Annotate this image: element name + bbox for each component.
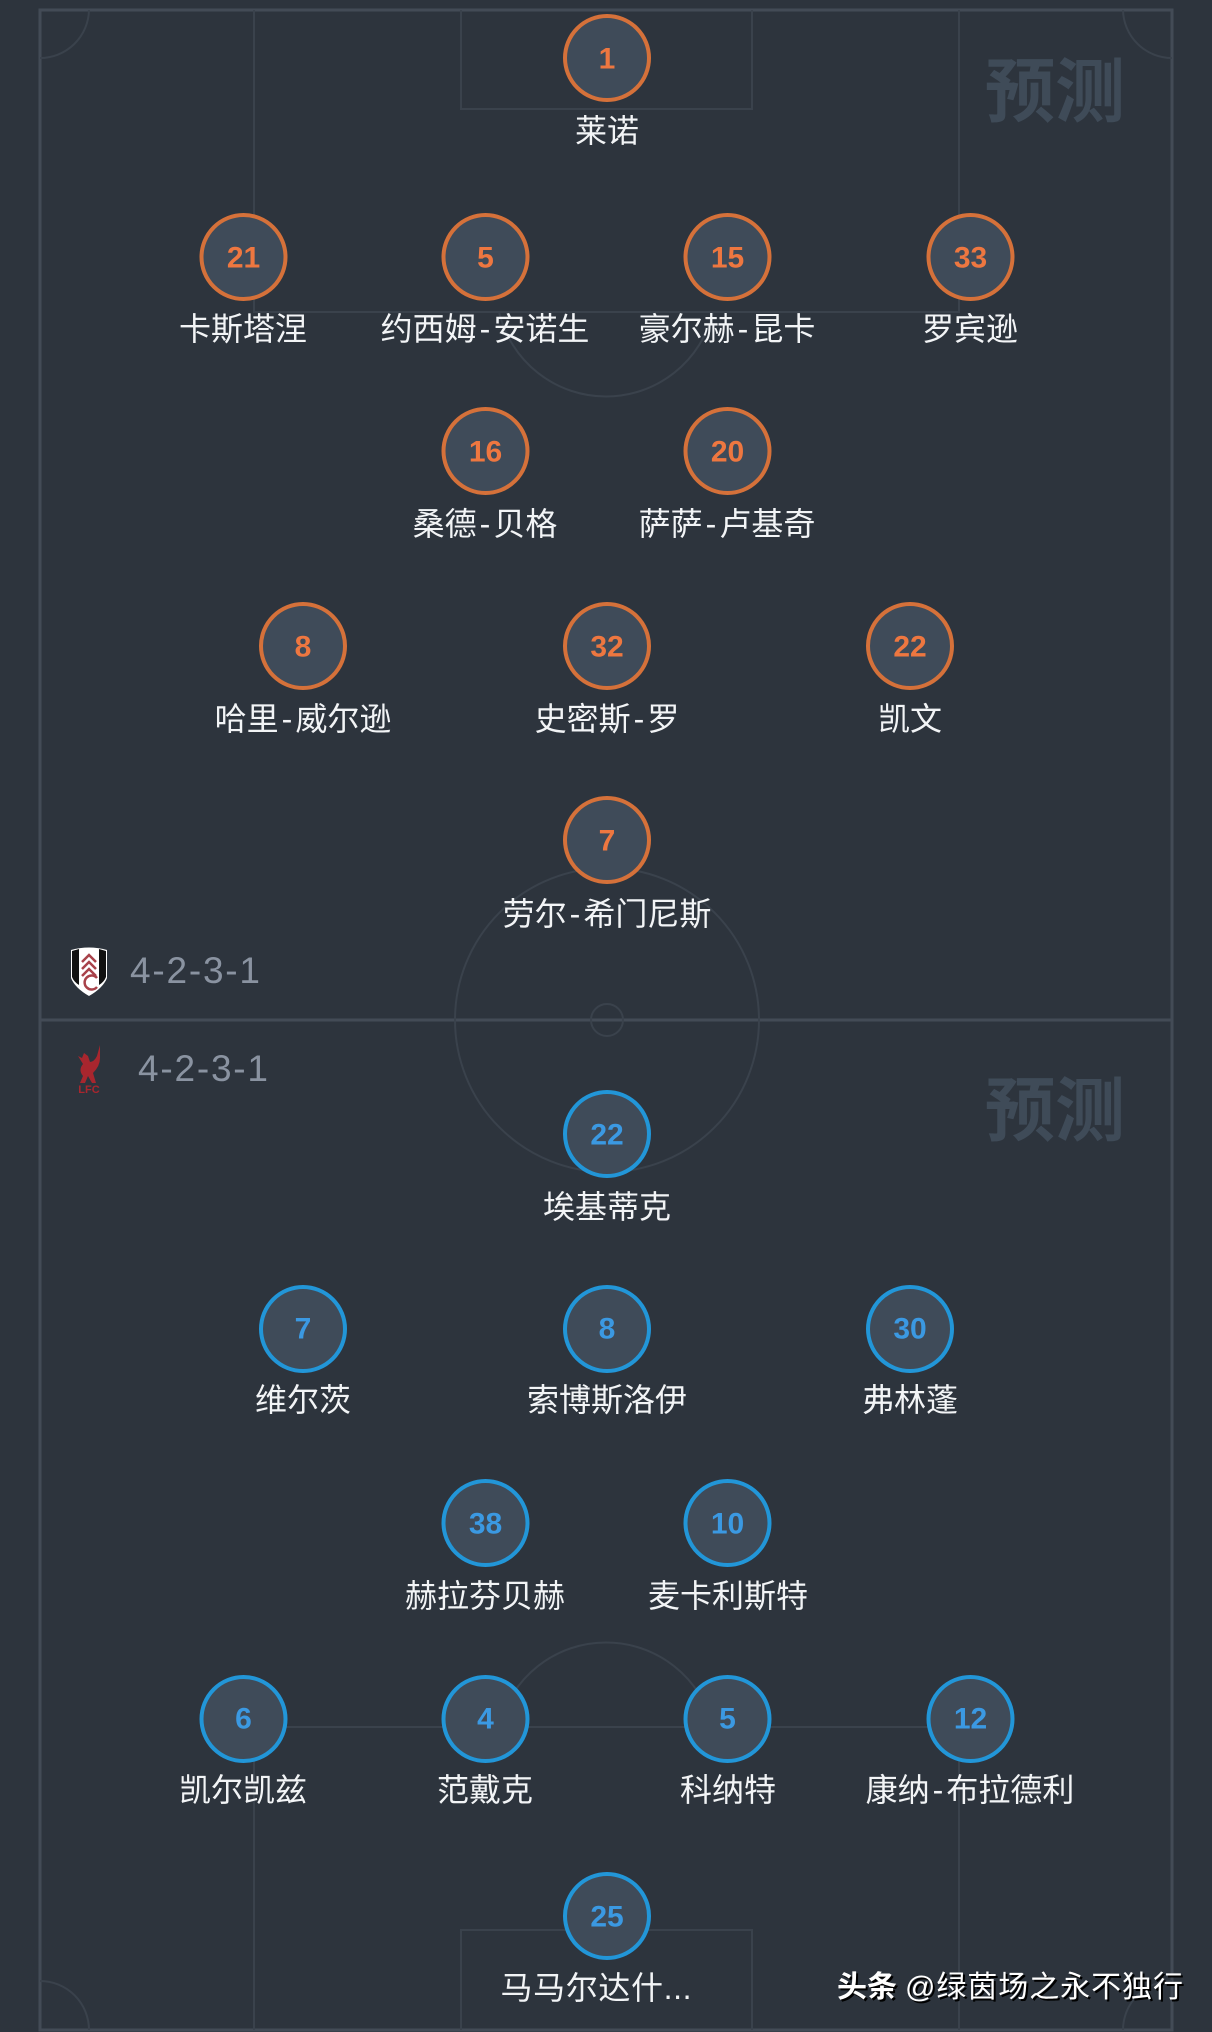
player: 萨萨-卢基奇 [639, 409, 815, 542]
player: 埃基蒂克: 22 [590, 1118, 624, 1152]
player: 维尔茨: 维尔茨 [255, 1382, 351, 1418]
player: 哈里-威尔逊: 8 [295, 630, 311, 664]
player: 马马尔达什: 25 [590, 1900, 624, 1934]
player: 桑德-贝格: 16 [469, 436, 502, 468]
player: 劳尔-希门尼斯: 劳尔-希门尼斯 [503, 896, 711, 932]
player: 莱诺: 莱诺 [575, 113, 639, 149]
player: 萨萨-卢基奇: 萨萨-卢基奇 [639, 506, 815, 542]
player: 科纳特 [680, 1677, 776, 1808]
player: 麦卡利斯特: 10 [711, 1508, 744, 1540]
player: 康纳-布拉德利 [866, 1677, 1074, 1808]
player: 弗林蓬: 弗林蓬 [862, 1382, 958, 1418]
player: 史密斯-罗 [535, 604, 679, 737]
player: 卡斯塔涅: 卡斯塔涅 [179, 311, 307, 347]
player: 约西姆-安诺生: 约西姆-安诺生 [381, 311, 589, 347]
player: 卡斯塔涅: 21 [227, 242, 260, 274]
player: 维尔茨 [255, 1287, 351, 1418]
player: 罗宾逊: 罗宾逊 [922, 311, 1018, 347]
player: 凯文 [868, 604, 952, 737]
player: 罗宾逊 [922, 215, 1018, 347]
player: 康纳-布拉德利: 12 [954, 1702, 987, 1736]
player: 弗林蓬: 30 [893, 1312, 927, 1346]
player: 索博斯洛伊 [527, 1287, 687, 1418]
icon: Liverpool crest: LFC [78, 1084, 100, 1096]
formation: Liverpool: 4-2-3-1 [138, 1048, 268, 1089]
player: 史密斯-罗: 史密斯-罗 [535, 701, 679, 737]
player: 范戴克 [437, 1677, 533, 1808]
player: 萨萨-卢基奇: 20 [711, 436, 744, 468]
player: 豪尔赫-昆卡: 豪尔赫-昆卡 [639, 311, 815, 347]
player: 卡斯塔涅 [179, 215, 307, 347]
player: 弗林蓬 [862, 1287, 958, 1418]
player: 豪尔赫-昆卡 [639, 215, 815, 347]
player: 桑德-贝格 [413, 409, 557, 542]
player: 莱诺 [565, 16, 649, 149]
player: 豪尔赫-昆卡: 15 [711, 242, 744, 274]
source watermark: 头条 [839, 1973, 899, 2006]
player: 劳尔-希门尼斯 [503, 798, 711, 932]
player: 劳尔-希门尼斯: 7 [599, 824, 615, 858]
player: 凯尔凯兹: 6 [235, 1702, 252, 1736]
icon: Liverpool crest [78, 1045, 100, 1096]
player: 马马尔达什 [500, 1874, 692, 2006]
player: 哈里-威尔逊 [215, 604, 391, 737]
player: 马马尔达什: 马马尔达什... [500, 1970, 692, 2006]
player: 罗宾逊: 33 [954, 242, 987, 274]
player: 凯文: 凯文 [878, 701, 942, 737]
player: 赫拉芬贝赫 [405, 1481, 565, 1614]
formation: Fulham: 4-2-3-1 [130, 950, 260, 991]
player: 麦卡利斯特 [648, 1481, 808, 1614]
player: 范戴克: 4 [477, 1702, 494, 1736]
player: 康纳-布拉德利: 康纳-布拉德利 [866, 1772, 1074, 1808]
player: 莱诺: 1 [599, 42, 615, 76]
player: 科纳特: 5 [719, 1702, 736, 1736]
player: 约西姆-安诺生 [381, 215, 589, 347]
player: 索博斯洛伊: 索博斯洛伊 [527, 1382, 687, 1418]
player: 哈里-威尔逊: 哈里-威尔逊 [215, 701, 391, 737]
player: 凯尔凯兹: 凯尔凯兹 [179, 1772, 307, 1808]
player: 约西姆-安诺生: 5 [477, 242, 494, 274]
icon: Fulham crest [71, 948, 107, 996]
player: 凯尔凯兹 [179, 1677, 307, 1808]
player: 赫拉芬贝赫: 赫拉芬贝赫 [405, 1578, 565, 1614]
source watermark: 头条 [837, 1971, 897, 2004]
source watermark: @绿茵场之永不独行 [907, 1973, 1185, 2006]
watermark: bottom prediction: 预测 [985, 1072, 1125, 1150]
player: 维尔茨: 7 [295, 1312, 311, 1346]
player: 埃基蒂克: 埃基蒂克 [543, 1189, 671, 1225]
player: 范戴克: 范戴克 [437, 1772, 533, 1808]
player: 科纳特: 科纳特 [680, 1772, 776, 1808]
player: 桑德-贝格: 桑德-贝格 [413, 506, 557, 542]
player: 凯文: 22 [893, 630, 927, 664]
watermark: top prediction: 预测 [985, 53, 1125, 131]
player: 埃基蒂克 [543, 1092, 671, 1225]
player: 史密斯-罗: 32 [590, 630, 624, 664]
source watermark: @绿茵场之永不独行 [905, 1971, 1183, 2004]
player: 麦卡利斯特: 麦卡利斯特 [648, 1578, 808, 1614]
player: 赫拉芬贝赫: 38 [469, 1508, 502, 1540]
player: 索博斯洛伊: 8 [599, 1312, 615, 1346]
